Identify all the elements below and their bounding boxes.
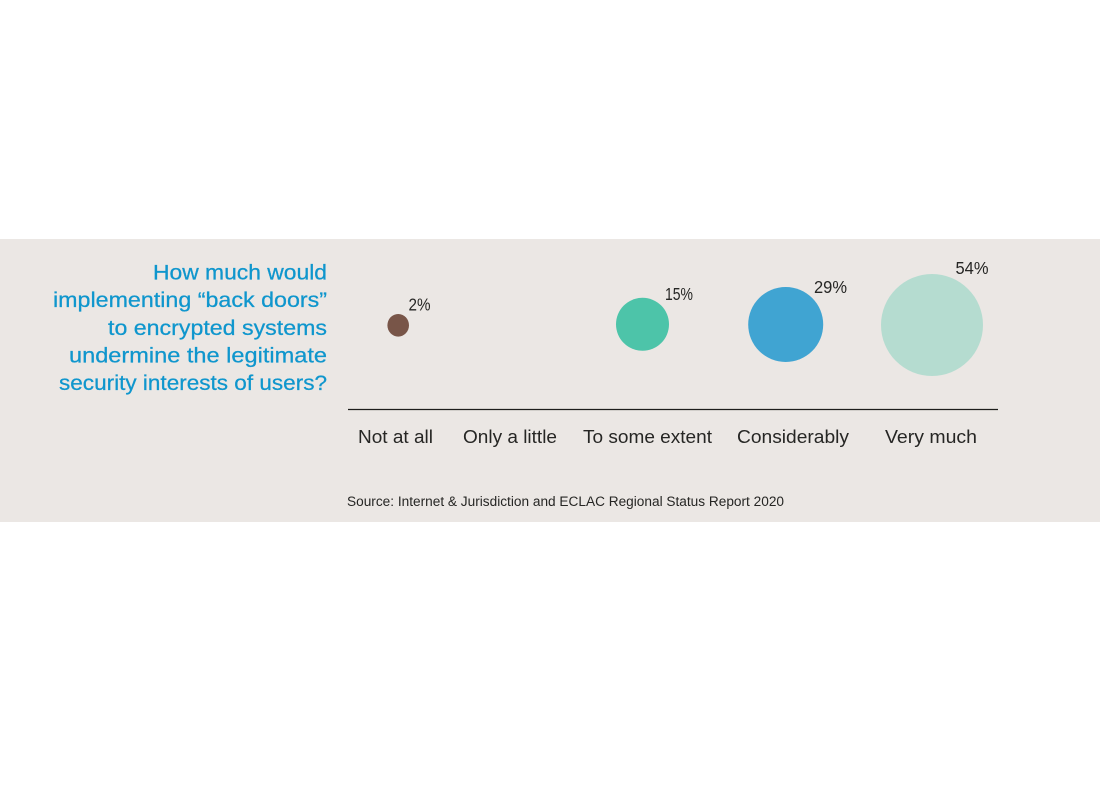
source note: Source: Internet & Jurisdiction and ECLAC Regional Status Report 2020 bbox=[347, 494, 784, 509]
axis labels: Not at all bbox=[358, 427, 433, 447]
title: to encrypted systems bbox=[108, 316, 327, 340]
bubble: not at all 2% bbox=[387, 294, 430, 337]
title bbox=[53, 260, 327, 395]
bubble: to some extent 15% bbox=[616, 284, 693, 351]
panel: background band bbox=[0, 239, 1100, 522]
bubble: not at all 2%: 2% bbox=[408, 294, 430, 314]
title: How much would bbox=[153, 260, 327, 284]
axis labels bbox=[358, 427, 977, 447]
axis labels: To some extent bbox=[583, 427, 712, 447]
title: implementing “back doors” bbox=[53, 288, 327, 312]
bubble: considerably 29% bbox=[748, 277, 847, 362]
bubble: to some extent 15%: 15% bbox=[665, 284, 693, 304]
title: undermine the legitimate bbox=[69, 344, 327, 368]
bubble: very much 54% bbox=[881, 258, 988, 376]
bubble: considerably 29%: 29% bbox=[814, 277, 847, 297]
axis labels: Considerably bbox=[737, 427, 849, 447]
title: security interests of users? bbox=[59, 371, 327, 395]
axis line bbox=[348, 408, 998, 410]
axis labels: Only a little bbox=[463, 427, 557, 447]
bubble: very much 54%: 54% bbox=[956, 258, 988, 278]
axis labels: Very much bbox=[885, 427, 977, 447]
